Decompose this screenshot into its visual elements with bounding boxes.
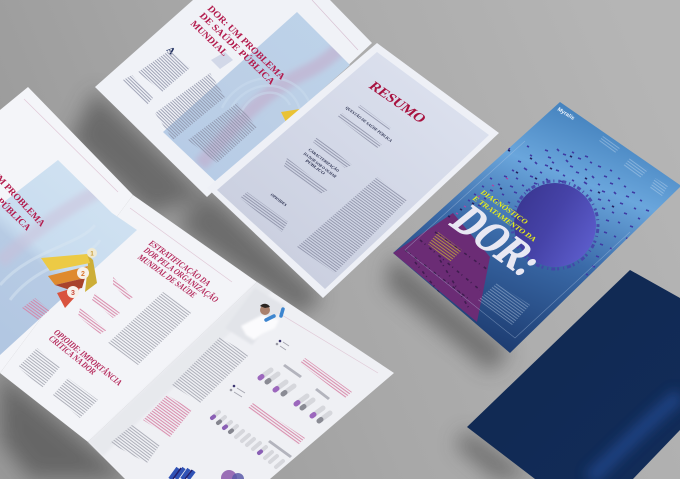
test tube chart: lower row (212, 412, 283, 467)
cover title: DIAGNÓSTICO (478, 188, 531, 226)
page: resumo (207, 43, 499, 298)
stacked bar chart (170, 468, 194, 479)
heading: resumo: RESUMO (365, 80, 429, 126)
heading: opioide: CRÍTICA NA DOR (46, 334, 99, 376)
cover title (439, 188, 555, 284)
left page pink rule (24, 99, 118, 192)
brochure: WHO pain ladder spread (0, 87, 394, 479)
cover subtitle (428, 232, 462, 262)
heading: estratificação: MUNDIAL DE SAÚDE (135, 253, 199, 299)
page rules (130, 208, 378, 373)
chart captions (268, 364, 330, 458)
figure: shattered head (514, 183, 596, 267)
photo: scientist (225, 288, 285, 345)
subheading: caracterização: DA DOR SOB O OLHAR (302, 151, 339, 179)
back cover: navy (467, 270, 680, 479)
step number 3: 3 (71, 290, 75, 297)
page: left (0, 87, 133, 373)
cover title: DOR: (439, 198, 555, 284)
heading: dor, um problema: MUNDIAL (188, 19, 229, 58)
cover small text blocks (478, 136, 668, 325)
heading: estratificação: DOR PELA ORGANIZAÇÃO (141, 246, 221, 304)
venn circles (221, 470, 244, 479)
subheading: opioides: OPIOIDES (269, 192, 289, 207)
particles (468, 146, 649, 275)
yellow triangle (281, 109, 300, 122)
step number 2: 2 (81, 271, 85, 278)
legends (230, 340, 289, 397)
small tinted box (211, 52, 233, 69)
cover frame (405, 141, 630, 338)
decorative pink rule (312, 0, 358, 50)
cover title: E TRATAMENTO DA (470, 194, 539, 243)
logo: Myralis (556, 107, 576, 122)
drop capital: A (164, 45, 178, 57)
pink text blocks (22, 277, 352, 445)
image panel (0, 160, 137, 355)
soft shadows (0, 90, 535, 479)
body text columns (123, 50, 257, 163)
heading: dor, um problema: DE SAÚDE PÚBLICA (197, 10, 278, 87)
heading: dor, um problema: DOR: UM PROBLEMA (205, 4, 287, 82)
test tube chart: upper row (260, 370, 330, 421)
subheading: caracterização: PÚBLICO (304, 158, 327, 176)
page: left page (95, 0, 372, 197)
pyramid chart icon (41, 248, 97, 308)
heading: opioide: OPIOIDE: IMPORTÂNCIA (51, 328, 125, 387)
body text blocks (240, 105, 407, 273)
page: middle (0, 195, 257, 442)
magazine cover (393, 102, 680, 353)
step number 1: 1 (90, 252, 94, 258)
brochure: public health spread (95, 0, 499, 298)
heading: estratificação: ESTRATIFICAÇÃO DA (146, 239, 214, 288)
subheading: caracterização: CARACTERIZAÇÃO (307, 147, 341, 173)
subheading: questão de saúde pública: QUESTÃO DE SAÚDE PÚBLICA (344, 105, 394, 143)
image panel (163, 12, 350, 183)
body text columns (18, 292, 249, 463)
page: right (88, 282, 394, 479)
figure: shoulders (393, 213, 490, 322)
